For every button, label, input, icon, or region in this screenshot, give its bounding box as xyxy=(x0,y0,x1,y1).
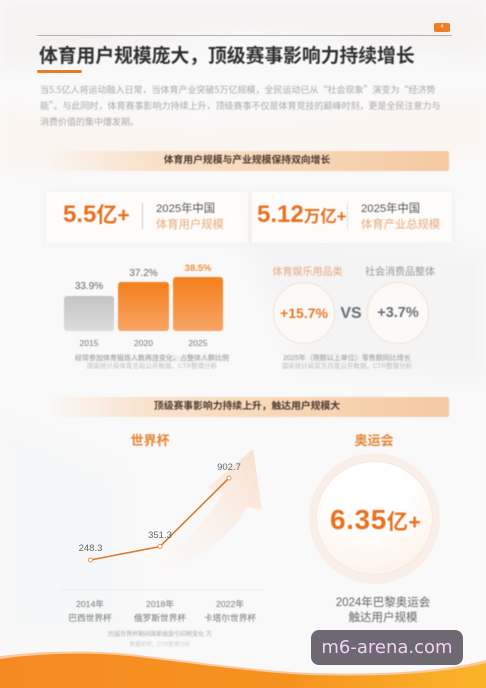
data point 2022: 902.7 xyxy=(217,462,241,473)
axis label: 2022: 卡塔尔世界杯 xyxy=(204,613,256,623)
growth arrow xyxy=(163,449,262,572)
section heading: dual growth xyxy=(45,151,449,171)
data point 2018: 351.3 xyxy=(148,530,172,541)
industry description: 体育产业总规模 xyxy=(361,219,440,231)
industry divider xyxy=(347,203,348,229)
bar 2015 xyxy=(64,281,114,348)
intro paragraph: 能”。与此同时，体育赛事影响力持续上升，顶级赛事不仅是体育竞技的巅峰时刻，更是全民注意力与 xyxy=(40,99,441,112)
World Cup caption: 数据说明，CTR整理分析 xyxy=(130,642,190,648)
data point 2018 xyxy=(148,530,172,548)
axis label: 2018: 2018年 xyxy=(146,599,174,609)
circle: +15.7% xyxy=(273,282,335,344)
users description xyxy=(156,202,224,231)
line chart: World Cup xyxy=(60,449,262,590)
trend line xyxy=(90,478,229,560)
label: sports goods: 体育娱乐用品类 xyxy=(272,267,342,278)
bar 2020: 2020 xyxy=(134,338,153,348)
title underline xyxy=(37,70,82,73)
bar 2015: 2015 xyxy=(80,338,99,348)
label: consumer goods: 社会消费品整体 xyxy=(365,267,435,278)
industry figure: 5.12万亿+ xyxy=(257,201,346,228)
intro paragraph xyxy=(40,83,441,128)
bar chart caption: 国家统计局体育总局公开数据，CTR整理分析 xyxy=(87,363,217,370)
comparison caption xyxy=(282,354,412,370)
card: industry xyxy=(252,192,452,243)
section heading: top events xyxy=(45,397,449,417)
data point 2022 xyxy=(217,462,241,480)
header rule xyxy=(37,35,452,36)
bar chart: participation xyxy=(64,263,224,348)
intro paragraph: 消费价值的集中爆发期。 xyxy=(40,115,139,128)
users divider xyxy=(142,203,143,229)
inner circle xyxy=(317,462,432,574)
axis label: 2022: 2022年 xyxy=(216,599,244,609)
bar 2020 xyxy=(118,268,169,348)
bar 2020: 37.2% xyxy=(129,268,158,279)
users description: 体育用户规模 xyxy=(156,219,224,231)
watermark: m6-arena.com xyxy=(321,637,453,658)
section heading: top events: 顶级赛事影响力持续上升，触达用户规模大 xyxy=(154,401,340,412)
axis label: 2018: 俄罗斯世界杯 xyxy=(134,613,186,623)
comparison caption: 国家统计局官方月度公开数据，CTR整理分析 xyxy=(282,363,412,370)
bar 2025: 38.5% xyxy=(185,263,212,274)
heading: Olympics: 奥运会 xyxy=(354,433,394,448)
industry description xyxy=(360,202,440,231)
circle: +15.7%: +15.7% xyxy=(280,305,328,321)
Olympics description: 2024年巴黎奥运会 xyxy=(336,597,430,609)
bar 2025 xyxy=(173,263,223,348)
title: 体育用户规模庞大，顶级赛事影响力持续增长 xyxy=(39,45,415,66)
World Cup caption xyxy=(108,630,212,648)
users description: 2025年中国 xyxy=(156,203,215,215)
circle: +3.7% xyxy=(367,282,429,344)
Olympics figure: 6.35亿+ xyxy=(330,504,421,535)
VS: VS xyxy=(340,305,362,322)
bar chart caption xyxy=(74,354,230,370)
comparison caption: 2025年（限额以上单位）零售额同比增长 xyxy=(283,355,411,362)
bar 2025: 2025 xyxy=(189,338,208,348)
page number tag: 4 xyxy=(440,24,444,30)
section heading: dual growth: 体育用户规模与产业规模保持双向增长 xyxy=(164,155,330,166)
Olympics description xyxy=(336,596,430,624)
axis label: 2014: 巴西世界杯 xyxy=(68,613,112,623)
data point 2014: 248.3 xyxy=(79,543,102,554)
axis label: 2022 xyxy=(204,599,256,623)
page number tag xyxy=(434,23,450,32)
users figure: 5.5亿+ xyxy=(63,201,130,228)
industry description: 2025年中国 xyxy=(361,203,420,215)
intro paragraph: 当5.5亿人将运动融入日常，当体育产业突破5万亿规模，全民运动已从“社会现象”演变为“经济势 xyxy=(40,83,436,96)
bar chart caption: 经常参加体育锻炼人数再连变化，占整体人群比例 xyxy=(75,355,229,362)
circle: +3.7%: +3.7% xyxy=(377,305,419,321)
axis label: 2018 xyxy=(134,599,186,623)
data point 2014 xyxy=(79,543,102,562)
World Cup caption: 历届世界杯期间国家级旋引印刷变化 万 xyxy=(108,632,212,638)
baseline xyxy=(58,589,262,591)
axis label: 2014: 2014年 xyxy=(76,599,104,609)
Olympics circle xyxy=(309,453,440,584)
bottom wave xyxy=(0,652,486,688)
heading: World Cup: 世界杯 xyxy=(130,433,170,448)
Olympics description: 触达用户规模 xyxy=(348,612,418,624)
bar 2015: 33.9% xyxy=(75,281,103,292)
axis label: 2014 xyxy=(68,599,112,623)
watermark xyxy=(311,630,463,665)
card: users xyxy=(46,192,248,243)
